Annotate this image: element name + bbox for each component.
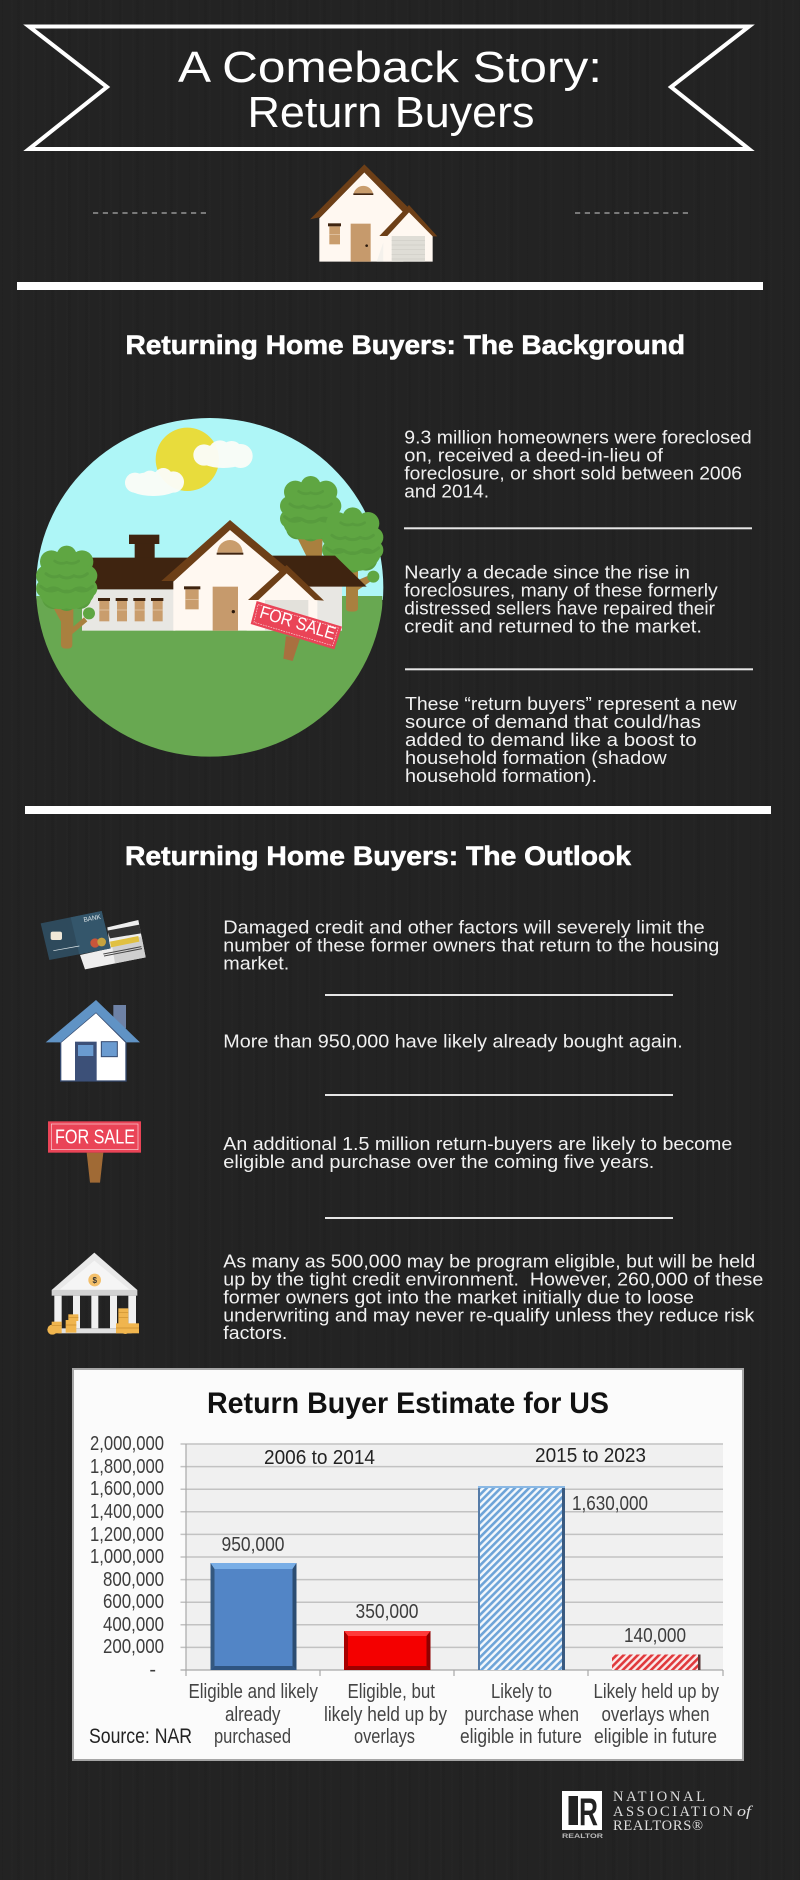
- logo: national association of realtors: R: [579, 1791, 598, 1834]
- icon: bank building: [47, 1253, 139, 1335]
- for sale sign: FOR SALE: [258, 602, 338, 644]
- bar: likely to purchase: [478, 1486, 565, 1670]
- category labels: Likely held up by: [594, 1681, 719, 1703]
- text block: repaired credit: Nearly a decade since the rise in: [404, 562, 690, 582]
- text block: additional buyers: eligible and purchase over the coming five years.: [223, 1152, 654, 1172]
- source note: Source: NAR: [89, 1725, 192, 1748]
- house right wing: [267, 556, 367, 631]
- y axis labels: [90, 1433, 164, 1681]
- text block: return buyers demand: source of demand that could/has: [405, 712, 701, 732]
- text block: damaged credit: [223, 917, 719, 973]
- text block: repaired credit: foreclosures, many of these formerly: [404, 580, 718, 600]
- illustration: neighborhood house circle: [33, 413, 387, 763]
- text block: repaired credit: credit and returned to the market.: [404, 616, 702, 636]
- period labels: 2006 to 2014: [264, 1447, 375, 1469]
- text block: program eligible: [223, 1251, 763, 1343]
- text block: return buyers demand: These “return buyers” represent a new: [405, 694, 738, 714]
- text block: program eligible: underwriting and may never re-qualify unless they reduce risk: [223, 1305, 755, 1325]
- logo: national association of realtors: of: [737, 1804, 753, 1820]
- category labels: likely held up by: [324, 1704, 447, 1726]
- text block: damaged credit: number of these former owners that return to the housing: [223, 935, 719, 955]
- logo: national association of realtors: REALTOR: [562, 1833, 603, 1840]
- category labels: Eligible, but: [348, 1681, 435, 1703]
- y axis labels: 600,000: [103, 1591, 164, 1613]
- y axis labels: 800,000: [103, 1569, 164, 1591]
- category labels: overlays: [354, 1726, 415, 1748]
- text block: program eligible: factors.: [223, 1323, 287, 1343]
- text block: program eligible: up by the tight credit environment. However, 260,000 of these: [223, 1269, 763, 1289]
- category labels: overlays when: [602, 1704, 710, 1726]
- text block: return buyers demand: household formation (shadow: [405, 748, 668, 768]
- category labels: eligible in future: [594, 1726, 717, 1748]
- chart panel: return buyer estimate: [73, 1369, 743, 1760]
- period labels: [264, 1445, 646, 1469]
- text block: additional buyers: [223, 1134, 732, 1172]
- tree back right: [280, 476, 341, 560]
- bar: eligible and likely purchased: [210, 1563, 296, 1670]
- sun: [156, 428, 219, 491]
- logo: national association of realtors: NATIONAL: [613, 1789, 705, 1805]
- logo: national association of realtors: REALTORS®: [613, 1818, 703, 1834]
- y axis labels: 1,000,000: [90, 1546, 164, 1568]
- icon: for sale sign: [48, 1121, 141, 1183]
- logo: national association of realtors: [562, 1789, 753, 1840]
- title text: Return Buyers: [248, 88, 534, 137]
- tree left: [36, 546, 97, 649]
- category labels: Likely to: [491, 1681, 552, 1703]
- bar value labels: 950,000: [222, 1534, 284, 1556]
- icon: bank building: $: [92, 1276, 97, 1285]
- text block: program eligible: former owners got into the market initially due to loose: [223, 1287, 694, 1307]
- title banner: [29, 26, 749, 149]
- y axis labels: 1,800,000: [90, 1456, 164, 1478]
- dashed line right: [575, 212, 691, 214]
- divider bar middle: [25, 806, 771, 814]
- text block: return buyers demand: [405, 694, 738, 786]
- y axis labels: 1,200,000: [90, 1524, 164, 1546]
- category labels: [188, 1681, 719, 1748]
- house left wing: [82, 535, 203, 631]
- text block: already bought: More than 950,000 have likely already bought again.: [223, 1031, 683, 1051]
- icon: for sale sign: FOR SALE: [55, 1126, 135, 1148]
- title text: [178, 43, 602, 137]
- house garage: [247, 565, 324, 631]
- for sale sign: [251, 601, 342, 661]
- period labels: 2015 to 2023: [535, 1445, 646, 1467]
- y axis labels: -: [149, 1659, 156, 1681]
- heading: the outlook: Returning Home Buyers: The Outlook: [125, 841, 632, 871]
- divider bar top: [17, 282, 763, 290]
- bar: future held up by overlays: [612, 1654, 700, 1670]
- icon: blue house: [46, 1000, 140, 1081]
- icon: credit cards: [41, 911, 146, 969]
- bar: held up by overlays: [344, 1631, 430, 1670]
- plot area and gridlines: [180, 1444, 723, 1676]
- text block: damaged credit: Damaged credit and other factors will severely limit the: [223, 917, 705, 937]
- category labels: purchased: [214, 1726, 291, 1748]
- text block: foreclosures: [404, 427, 752, 501]
- category labels: purchase when: [464, 1704, 579, 1726]
- clouds: [125, 440, 253, 496]
- text block: return buyers demand: household formation).: [405, 766, 597, 786]
- icon: small house: [310, 164, 437, 262]
- text block: additional buyers: An additional 1.5 million return-buyers are likely to become: [223, 1134, 732, 1154]
- text block: return buyers demand: added to demand like a boost to: [405, 730, 697, 750]
- text block: program eligible: As many as 500,000 may be program eligible, but will be held: [223, 1251, 755, 1271]
- bar value labels: 350,000: [356, 1601, 418, 1623]
- category labels: Eligible and likely: [188, 1681, 318, 1703]
- house main gable: [161, 520, 289, 631]
- y axis labels: 1,600,000: [90, 1478, 164, 1500]
- bar value labels: [222, 1493, 686, 1647]
- y axis labels: 1,400,000: [90, 1501, 164, 1523]
- text block: foreclosures: foreclosure, or short sold between 2006: [404, 463, 742, 483]
- icon: credit cards: BANK: [83, 914, 102, 924]
- chart title: Return Buyer Estimate for US: [207, 1387, 609, 1420]
- category labels: eligible in future: [460, 1726, 582, 1748]
- y axis labels: 400,000: [103, 1614, 164, 1636]
- y axis labels: 200,000: [103, 1636, 164, 1658]
- text block: damaged credit: market.: [223, 953, 289, 973]
- tree front right: [322, 507, 383, 612]
- title text: A Comeback Story:: [178, 43, 602, 92]
- text block: repaired credit: [404, 562, 718, 636]
- text block: repaired credit: distressed sellers have repaired their: [404, 598, 715, 618]
- bar value labels: 140,000: [624, 1625, 686, 1647]
- category labels: already: [225, 1704, 280, 1726]
- heading: the background: Returning Home Buyers: The Background: [126, 330, 685, 360]
- y axis labels: 2,000,000: [90, 1433, 164, 1455]
- text block: foreclosures: and 2014.: [404, 481, 489, 501]
- bar value labels: 1,630,000: [572, 1493, 648, 1515]
- dashed line left: [93, 212, 209, 214]
- text block: foreclosures: on, received a deed-in-lieu of: [404, 445, 664, 465]
- text block: foreclosures: 9.3 million homeowners were foreclosed: [404, 427, 752, 447]
- logo: national association of realtors: ASSOCIATION: [613, 1804, 734, 1820]
